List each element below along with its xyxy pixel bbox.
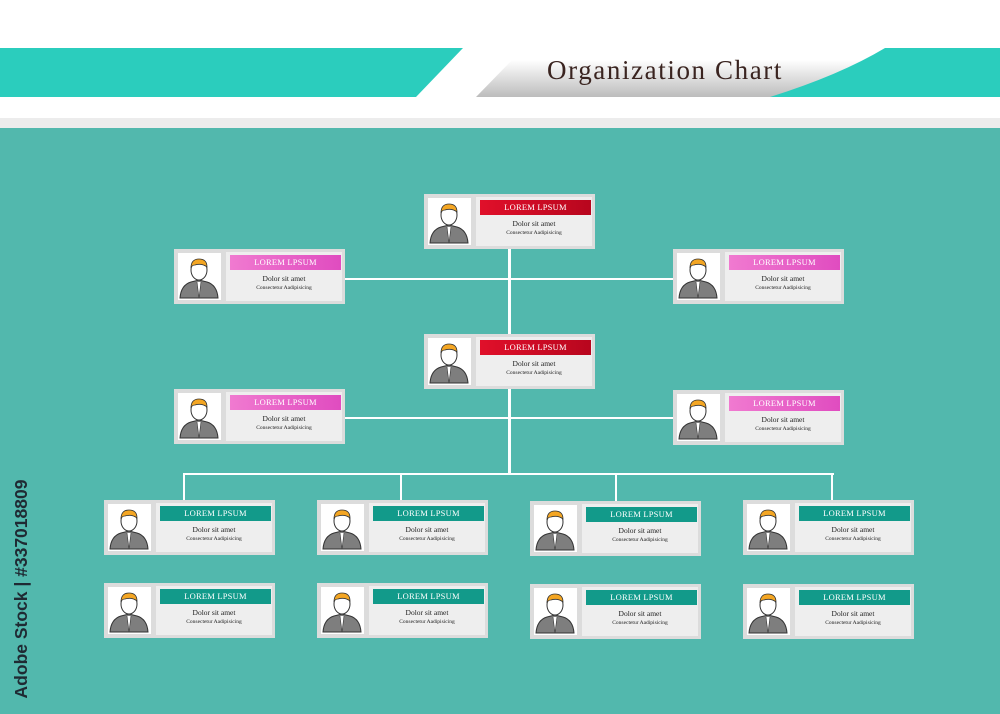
connector lines (122, 249, 834, 546)
card: left pink 1: Consectetur Aadipisicing (256, 285, 312, 291)
card: row5 col1: LOREM LPSUM (184, 508, 247, 518)
card: row6 col3: Dolor sit amet (619, 609, 661, 618)
card: row6 col2: Consectetur Aadipisicing (399, 619, 455, 625)
card: row6 col2: Dolor sit amet (406, 608, 448, 617)
title: Organization Chart (547, 55, 783, 85)
card: row6 col3: Consectetur Aadipisicing (612, 620, 668, 626)
card: middle red (424, 334, 595, 389)
card: left pink 2: Consectetur Aadipisicing (256, 425, 312, 431)
card: row6 col4: Consectetur Aadipisicing (825, 620, 881, 626)
card: row6 col3 (530, 584, 701, 639)
card: right pink 2: Consectetur Aadipisicing (755, 426, 811, 432)
card: row6 col3: LOREM LPSUM (610, 592, 673, 602)
card: row5 col1 (104, 500, 275, 555)
card: top red: LOREM LPSUM (504, 202, 567, 212)
card: row6 col2: LOREM LPSUM (397, 591, 460, 601)
card: row6 col1: Consectetur Aadipisicing (186, 619, 242, 625)
card: right pink 2 (673, 390, 844, 445)
card: row6 col4: Dolor sit amet (832, 609, 874, 618)
card: left pink 1 (174, 249, 345, 304)
watermark text: Adobe Stock | #337018809 (11, 480, 31, 698)
card: row6 col4 (743, 584, 914, 639)
card: row6 col1: LOREM LPSUM (184, 591, 247, 601)
card: left pink 1: LOREM LPSUM (254, 257, 317, 267)
card: row5 col4 (743, 500, 914, 555)
card: row5 col3 (530, 501, 701, 556)
card: left pink 1: Dolor sit amet (263, 274, 305, 283)
card: row5 col2 (317, 500, 488, 555)
card: row6 col1: Dolor sit amet (193, 608, 235, 617)
card: row5 col4: Consectetur Aadipisicing (825, 536, 881, 542)
card: row5 col1: Dolor sit amet (193, 525, 235, 534)
card: top red: Consectetur Aadipisicing (506, 230, 562, 236)
card: right pink 1: Dolor sit amet (762, 274, 804, 283)
card: middle red: Dolor sit amet (513, 359, 555, 368)
card: row5 col3: Consectetur Aadipisicing (612, 537, 668, 543)
card: row5 col4: Dolor sit amet (832, 525, 874, 534)
card: middle red: Consectetur Aadipisicing (506, 370, 562, 376)
card: left pink 2 (174, 389, 345, 444)
card: row5 col2: Consectetur Aadipisicing (399, 536, 455, 542)
card: left pink 2: LOREM LPSUM (254, 397, 317, 407)
card: row6 col2 (317, 583, 488, 638)
card: row5 col2: Dolor sit amet (406, 525, 448, 534)
card: row5 col3: Dolor sit amet (619, 526, 661, 535)
card: row5 col4: LOREM LPSUM (823, 508, 886, 518)
card: top red (424, 194, 595, 249)
card: right pink 1 (673, 249, 844, 304)
card: right pink 2: LOREM LPSUM (753, 398, 816, 408)
card: right pink 1: LOREM LPSUM (753, 257, 816, 267)
header band (0, 48, 1000, 128)
card: row5 col3: LOREM LPSUM (610, 509, 673, 519)
card: row5 col2: LOREM LPSUM (397, 508, 460, 518)
card: left pink 2: Dolor sit amet (263, 414, 305, 423)
card: right pink 1: Consectetur Aadipisicing (755, 285, 811, 291)
card: row6 col4: LOREM LPSUM (823, 592, 886, 602)
card: row6 col1 (104, 583, 275, 638)
card: row5 col1: Consectetur Aadipisicing (186, 536, 242, 542)
card: top red: Dolor sit amet (513, 219, 555, 228)
card: middle red: LOREM LPSUM (504, 342, 567, 352)
card: right pink 2: Dolor sit amet (762, 415, 804, 424)
